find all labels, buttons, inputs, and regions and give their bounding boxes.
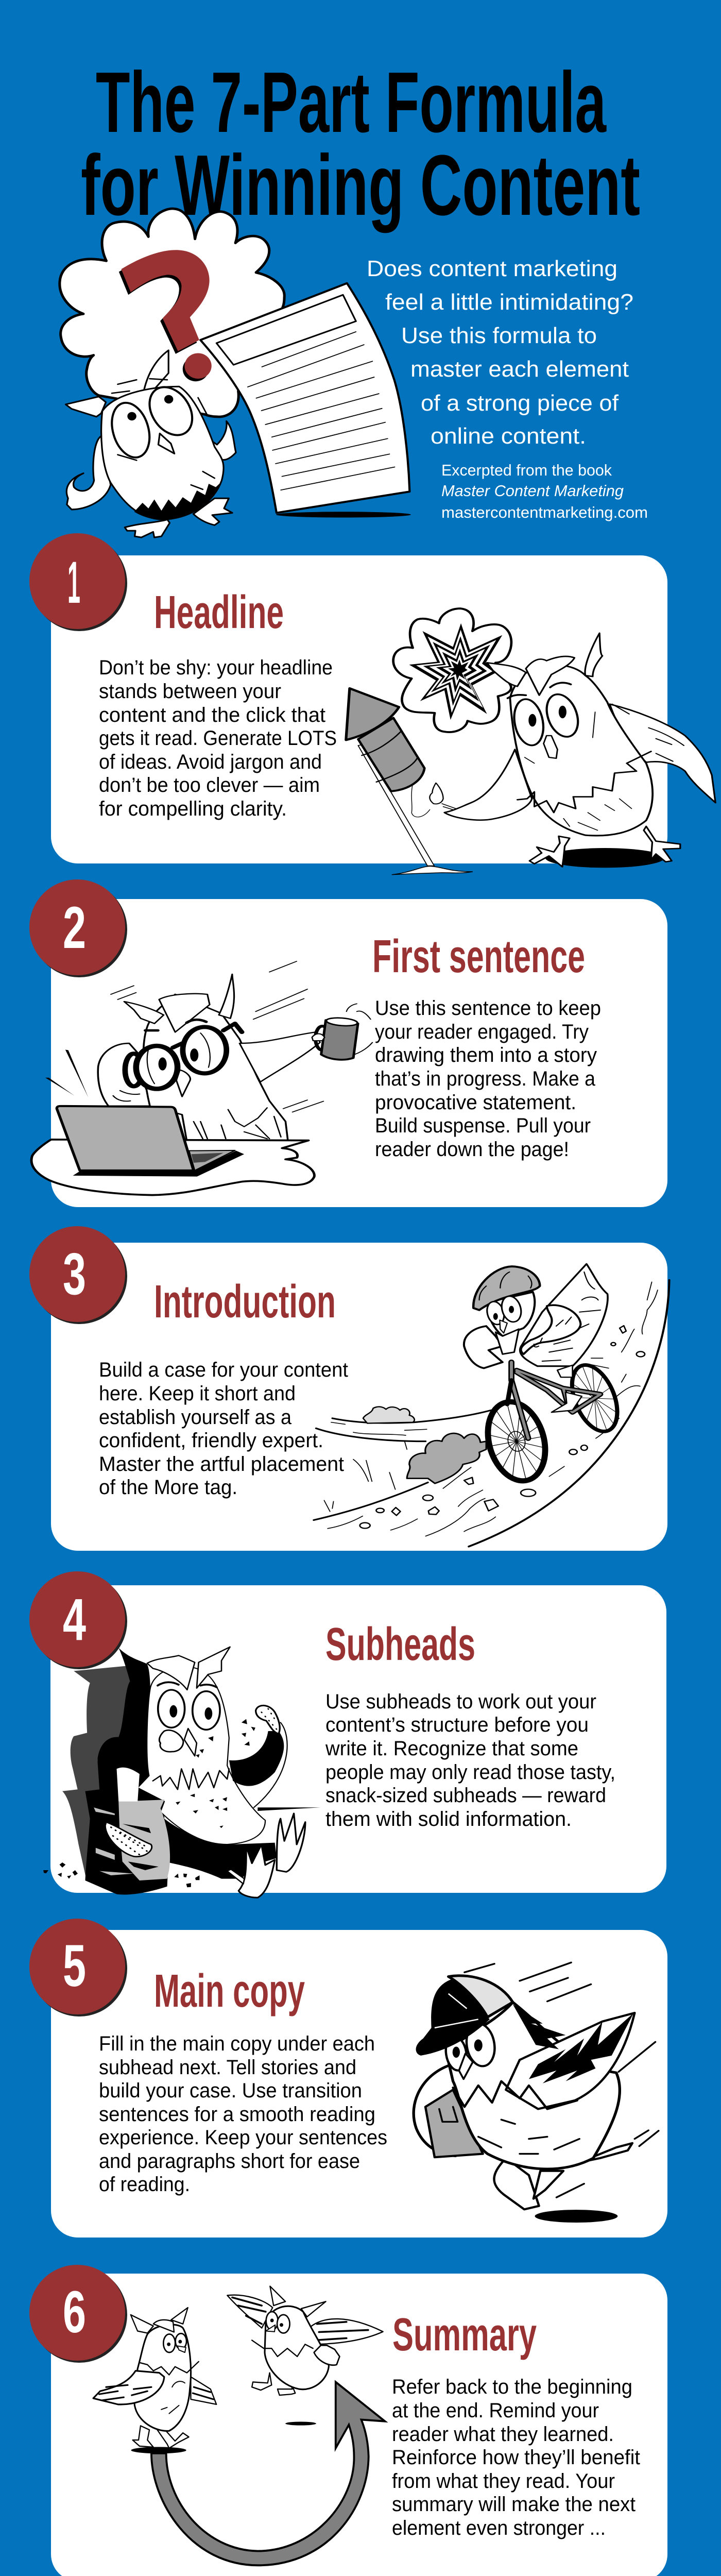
icon: shadow [62,1664,145,1879]
intro text [367,256,633,449]
illustration: running owl with package [414,1962,659,2223]
panel: 2 First sentence [29,879,667,1207]
icon: owl body [138,1647,265,1844]
icon: hill path [314,1280,670,1547]
intro text: feel a little intimidating? [385,290,633,315]
illustration: owl with glasses, coffee and laptop [31,961,372,1195]
body text: confident, friendly expert. [99,1429,323,1452]
body text: stands between your [99,680,281,703]
body text: Build suspense. Pull your [375,1114,591,1137]
icon: coffee mug [312,1017,358,1060]
icon: owl dark side [98,1648,277,1879]
illustration: two owls and circular arrow [93,2286,385,2565]
icon: surprise lines [45,1049,88,1097]
source credit: Excerpted from the book [441,461,612,479]
body text: for compelling clarity. [99,798,287,820]
body text: from what they read. Your [392,2470,615,2493]
number badge 6 [29,2265,127,2363]
icon: distant bush [363,1406,415,1423]
icon: startled owl [444,633,715,867]
icon: thought cloud [60,209,284,417]
card background [51,555,667,863]
body text: build your case. Use transition [99,2079,362,2102]
source credit: mastercontentmarketing.com [441,503,648,521]
number badge 5: 5 [63,1933,86,1999]
body text [99,2032,387,2196]
number badge 4 [29,1571,127,1669]
body text: Reinforce how they’ll benefit [392,2446,640,2469]
body text: Don’t be shy: your headline [99,656,333,679]
body text: Refer back to the beginning [392,2376,632,2398]
body text: at the end. Remind your [392,2399,599,2422]
number badge 5 [29,1919,127,2016]
body text: write it. Recognize that some [325,1737,578,1760]
panel: 3 Introduction [29,1226,670,1551]
icon: crumbs [43,1862,199,1887]
body text: content’s structure before you [325,1714,589,1736]
body text: and paragraphs short for ease [99,2150,360,2173]
title [81,55,640,233]
icon: owl [98,974,320,1141]
illustration: confused owl, thought cloud and paper [60,209,411,537]
card background [51,899,667,1207]
body text: establish yourself as a [99,1406,292,1429]
icon: walking owl [93,2308,216,2448]
intro text: Does content marketing [367,256,617,281]
number badge 2: 2 [63,895,86,961]
number badge 4: 4 [63,1587,86,1653]
card background [51,1243,667,1551]
icon: baseball cap [416,1976,513,2056]
icon: owl looking up [66,350,236,537]
body text: experience. Keep your sentences [99,2126,387,2149]
number badge 1: 1 [67,550,80,616]
icon: dust cloud [407,1433,486,1483]
icon: chip bag [85,1768,170,1894]
body text: drawing them into a story [375,1044,597,1066]
icon: shadow under owl [545,848,664,868]
body text: of ideas. Avoid jargon and [99,751,322,773]
body text: Build a case for your content [99,1359,348,1381]
body text: snack-sized subheads — reward [325,1784,606,1807]
number badge 1 [29,533,127,631]
arrow: circular return [151,2382,385,2565]
body text: reader what they learned. [392,2423,614,2446]
icon: whisker line [258,1807,320,1811]
number badge 2 [29,879,127,977]
heading: Summary [392,2309,537,2361]
body text: don’t be too clever — aim [99,774,320,796]
icon: speed lines [465,1962,659,2197]
panel: 1 Headline [29,533,715,875]
number badge 3: 3 [63,1241,86,1307]
body text [325,1690,615,1831]
body text [375,997,601,1161]
body text [99,1359,348,1499]
icon: sheet of paper [200,283,411,518]
heading: Main copy [154,1965,305,2017]
source credit: Master Content Marketing [441,482,624,500]
icon: ground shadows [131,2422,316,2453]
body text [392,2376,640,2539]
icon: rocket [346,688,472,875]
illustration: owl on mountain bike [314,1264,670,1547]
card background [50,1585,666,1893]
body text: subhead next. Tell stories and [99,2056,356,2079]
body text: sentences for a smooth reading [99,2103,375,2126]
body text: provocative statement. [375,1091,576,1114]
icon: bicycle [480,1360,626,1485]
icon: raised arm with chip [229,1705,287,1807]
card background [51,1930,667,2238]
body text: content and the click that [99,704,325,726]
body text [99,656,337,820]
number badge 6: 6 [63,2279,86,2345]
body text: your reader engaged. Try [375,1021,589,1043]
body text: element even stronger ... [392,2517,606,2539]
body text: them with solid information. [325,1808,572,1831]
body text: people may only read those tasty, [325,1761,615,1784]
icon: table [31,1140,314,1195]
number badge 3 [29,1226,127,1324]
icon: owl [414,2002,634,2209]
illustration: owl eating chips [43,1647,320,1897]
illustration: owl lighting a rocket [346,608,715,875]
body text: that’s in progress. Make a [375,1067,596,1090]
icon: left arm [98,1738,135,1789]
icon: question mark [119,250,212,381]
body text: Use subheads to work out your [325,1690,596,1713]
body text: of reading. [99,2173,190,2196]
icon: laptop [57,1106,244,1177]
icon: owl rider [464,1264,608,1412]
icon: flying owl [227,2286,383,2395]
icon: motion lines [111,961,372,1112]
body text: here. Keep it short and [99,1382,296,1405]
panel: 5 Main copy [29,1919,667,2238]
heading: Headline [154,587,284,638]
panel: 4 Subheads [29,1571,666,1897]
intro text: online content. [431,423,586,449]
panel: 6 Summary [29,2265,667,2576]
body text: reader down the page! [375,1138,569,1161]
icon: explosion [393,608,511,732]
intro text: of a strong piece of [421,391,619,416]
source credit [441,461,648,521]
body text: of the More tag. [99,1476,237,1499]
body text: Use this sentence to keep [375,997,601,1020]
body text: summary will make the next [392,2493,636,2516]
intro text: master each element [410,357,629,382]
icon: owl feet [227,1814,305,1897]
intro text: Use this formula to [401,323,597,348]
body text: Master the artful placement [99,1453,344,1476]
heading: Subheads [325,1619,475,1670]
body text: gets it read. Generate LOTS [99,727,337,750]
body text: Fill in the main copy under each [99,2032,375,2055]
heading: First sentence [372,931,585,982]
card background [51,2274,667,2576]
heading: Introduction [154,1276,336,1328]
icon: shadow [535,2210,617,2223]
